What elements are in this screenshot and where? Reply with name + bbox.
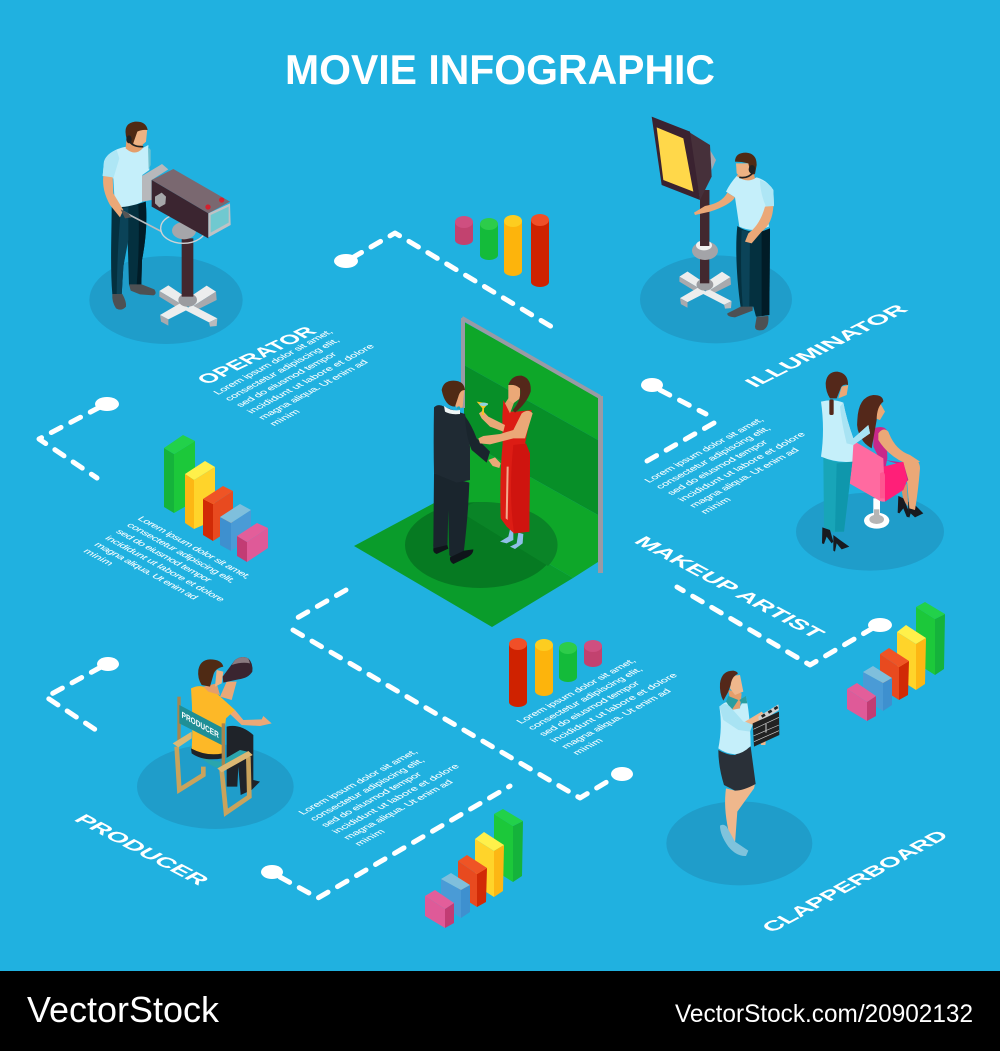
text block: center: sed do eiusmod tempor	[537, 680, 643, 738]
label: producer: PRODUCER	[69, 811, 215, 888]
text block: producer: consectetur adipiscing elit,	[308, 757, 427, 823]
bar chart: right	[847, 602, 945, 721]
text block: operator	[212, 324, 400, 428]
text block: illuminator: minim	[699, 496, 734, 516]
bar chart: bottom	[425, 809, 523, 928]
text block: illuminator: sed do eiusmod tempor	[665, 439, 771, 497]
title: MOVIE INFOGRAPHIC	[285, 46, 715, 93]
text block: left chart: sed do eiusmod tempor	[113, 528, 214, 584]
chair banner text: PRODUCER	[182, 709, 219, 741]
footer url: VectorStock.com/20902132	[675, 1000, 973, 1028]
label: operator: OPERATOR	[191, 323, 322, 387]
text block: illuminator: incididunt ut labore et dolore	[676, 431, 809, 503]
text block: center: minim	[571, 737, 606, 757]
text block: illuminator: Lorem ipsum dolor sit amet,	[643, 417, 767, 484]
connector: illuminator	[640, 378, 714, 465]
figure: producer in director chair	[137, 657, 294, 829]
text block: center: magna aliqua. Ut enim ad	[560, 688, 674, 750]
connector: makeup artist	[677, 587, 892, 665]
cylinder chart: center	[509, 638, 602, 707]
text block: producer: sed do eiusmod tempor	[319, 771, 425, 829]
label: illuminator: ILLUMINATOR	[739, 301, 913, 390]
text block: center: Lorem ipsum dolor sit amet,	[515, 658, 639, 725]
label: makeup artist: MAKEUP ARTIST	[629, 533, 831, 641]
text block: left chart: magna aliqua. Ut enim ad	[91, 541, 200, 601]
text block: illuminator: magna aliqua. Ut enim ad	[688, 447, 802, 509]
text block: operator: minim	[268, 408, 303, 428]
footer bar	[0, 971, 1000, 1051]
text block: producer: incididunt ut labore et dolore	[330, 763, 463, 835]
text block: producer: magna aliqua. Ut enim ad	[342, 779, 456, 841]
text block: center	[515, 653, 703, 757]
figure: makeup artist and client	[796, 372, 944, 571]
figure: operator with camera	[89, 122, 243, 344]
footer logo: VectorStock	[27, 989, 220, 1030]
text block: left chart	[80, 515, 260, 617]
text block: operator: incididunt ut labore et dolore	[245, 343, 378, 415]
figure: illuminator with softbox	[640, 117, 792, 343]
figure: clapperboard woman	[666, 671, 812, 885]
text block: left chart: incididunt ut labore et dolore	[102, 535, 227, 603]
connector: bottom	[261, 786, 510, 898]
text block: operator: sed do eiusmod tempor	[234, 351, 340, 409]
connector: center	[293, 590, 633, 798]
text block: producer: Lorem ipsum dolor sit amet,	[297, 749, 421, 816]
text block: center: consectetur adipiscing elit,	[526, 666, 645, 732]
text block: left chart: Lorem ipsum dolor sit amet,	[135, 515, 253, 580]
center scene: green screen	[354, 318, 603, 627]
bar chart: left	[164, 435, 268, 562]
text block: center: incididunt ut labore et dolore	[548, 672, 681, 744]
text block: illuminator: consectetur adipiscing elit,	[654, 425, 773, 491]
text block: producer: minim	[353, 828, 388, 848]
cylinder chart: top	[455, 214, 549, 287]
text block: operator: magna aliqua. Ut enim ad	[257, 359, 371, 421]
text block: left chart: consectetur adipiscing elit,	[124, 522, 238, 584]
text block: operator: consectetur adipiscing elit,	[223, 337, 342, 403]
connector: top	[334, 233, 552, 327]
connector: producer	[46, 657, 119, 732]
text block: producer	[297, 744, 485, 848]
text block: operator: Lorem ipsum dolor sit amet,	[212, 329, 336, 396]
label: clapperboard: CLAPPERBOARD	[756, 827, 954, 935]
connector: operator	[39, 397, 119, 478]
text block: left chart: minim	[80, 548, 115, 567]
text block: illuminator	[643, 412, 831, 516]
